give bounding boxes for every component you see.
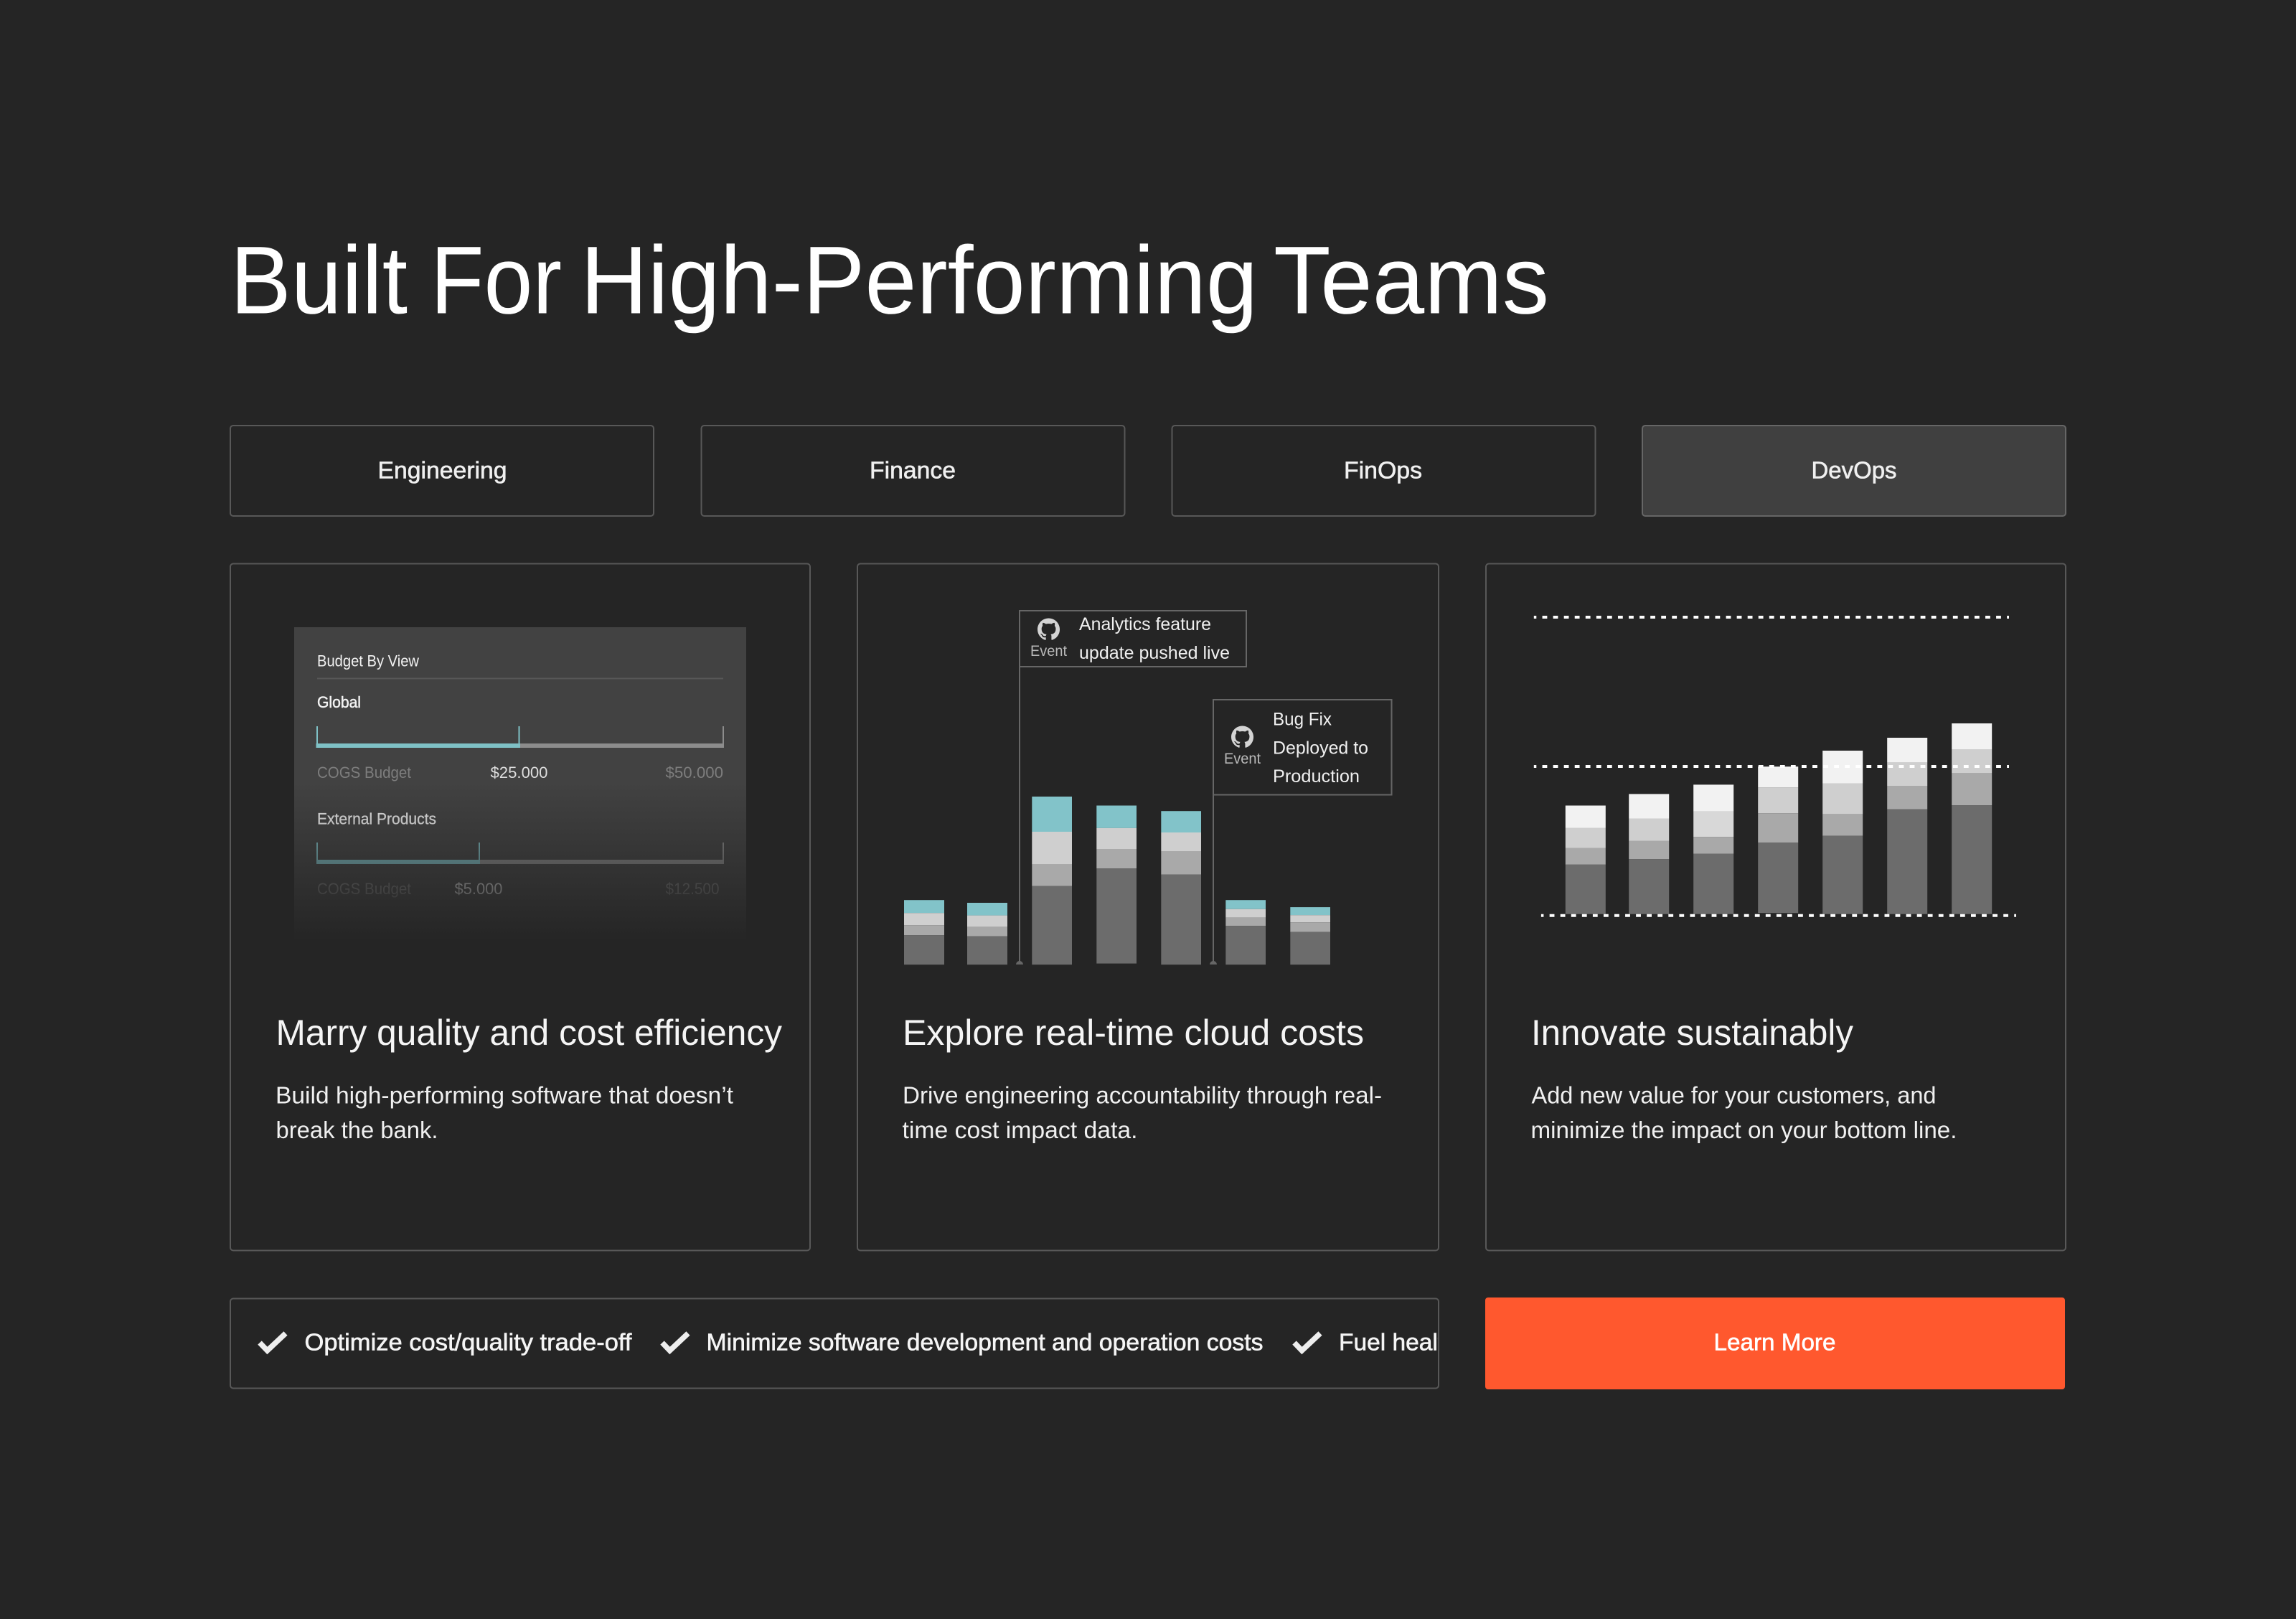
external products label: External Products bbox=[317, 810, 436, 828]
icon: github bbox=[1231, 726, 1253, 748]
bar 1 bbox=[1566, 805, 1606, 914]
icon: check bbox=[662, 1333, 688, 1351]
bar 5 bbox=[1161, 811, 1201, 965]
event label: Event bbox=[1030, 643, 1067, 660]
title: Teams bbox=[1274, 227, 1549, 334]
bar 3 bbox=[1032, 797, 1072, 965]
panel body: time cost impact data. bbox=[903, 1117, 1138, 1143]
title: For bbox=[430, 227, 562, 334]
callout text: update pushed live bbox=[1079, 643, 1230, 663]
bar 5 bbox=[1822, 751, 1863, 914]
tab: DevOps (active) bbox=[1642, 426, 2066, 516]
feature strip bbox=[230, 1299, 1458, 1388]
panel: innovate sustainably bbox=[1486, 564, 2066, 1250]
external products values: $12.500 bbox=[666, 880, 719, 898]
tab: Finance bbox=[702, 426, 1125, 516]
callout: analytics feature bbox=[1020, 611, 1246, 667]
event marker 2 bbox=[1210, 794, 1217, 965]
bar 4 bbox=[1096, 805, 1137, 964]
external products values bbox=[317, 880, 719, 898]
panel body bbox=[276, 1082, 733, 1143]
global budget values: $50.000 bbox=[666, 764, 723, 782]
panel body: minimize the impact on your bottom line. bbox=[1531, 1117, 1957, 1143]
global budget values: $25.000 bbox=[491, 764, 548, 782]
icon: github bbox=[1038, 619, 1060, 640]
panel body: Add new value for your customers, and bbox=[1531, 1082, 1936, 1108]
panel heading: Marry quality and cost efficiency bbox=[276, 1013, 782, 1053]
feature text: Optimize cost/quality trade-off bbox=[304, 1329, 632, 1355]
panel heading: Innovate sustainably bbox=[1531, 1013, 1853, 1053]
panel body bbox=[1531, 1082, 1957, 1143]
panel body: Drive engineering accountability through real- bbox=[903, 1082, 1382, 1108]
external products values: COGS Budget bbox=[317, 880, 411, 898]
external products values: $5.000 bbox=[455, 880, 502, 898]
bar 2 bbox=[1629, 794, 1669, 914]
title: High-Performing bbox=[580, 227, 1258, 334]
card heading: Budget By View bbox=[317, 652, 419, 670]
callout text bbox=[1079, 614, 1230, 663]
stacked bar chart bbox=[1566, 723, 1992, 914]
panel body bbox=[903, 1082, 1382, 1143]
panel: quality and cost bbox=[230, 564, 810, 1250]
tab: DevOps (active): DevOps bbox=[1811, 456, 1897, 484]
tabs row bbox=[230, 426, 2066, 516]
tab: Finance: Finance bbox=[870, 456, 956, 484]
icon: check bbox=[260, 1333, 286, 1351]
threshold lines bbox=[1534, 617, 2016, 916]
panel body: Build high-performing software that doesn’t bbox=[276, 1082, 733, 1108]
callout text: Bug Fix bbox=[1273, 709, 1332, 729]
bar 6 bbox=[1887, 738, 1927, 914]
global budget values bbox=[317, 764, 723, 782]
event label: Event bbox=[1224, 751, 1261, 767]
bar 2 bbox=[967, 903, 1007, 965]
callout text: Deployed to bbox=[1273, 738, 1368, 758]
button: learn more: Learn More bbox=[1713, 1329, 1835, 1355]
title bbox=[230, 227, 1549, 334]
tab: FinOps: FinOps bbox=[1344, 456, 1422, 484]
stacked bar chart bbox=[904, 797, 1330, 965]
bar 7 bbox=[1290, 907, 1330, 965]
callout text: Analytics feature bbox=[1079, 614, 1211, 634]
callout text: Production bbox=[1273, 766, 1360, 787]
bar 1 bbox=[904, 900, 944, 965]
bar 6 bbox=[1225, 900, 1266, 965]
tab: Engineering bbox=[230, 426, 654, 516]
global label: Global bbox=[317, 693, 361, 711]
callout text bbox=[1273, 709, 1368, 787]
feature text: Minimize software development and operation costs bbox=[706, 1329, 1263, 1355]
title: Built bbox=[230, 227, 408, 334]
panel heading: Explore real-time cloud costs bbox=[903, 1013, 1364, 1053]
tab: FinOps bbox=[1172, 426, 1596, 516]
feature text (clipped): Fuel health bbox=[1339, 1329, 1458, 1356]
button: learn more bbox=[1485, 1297, 2065, 1389]
bar 7 bbox=[1952, 723, 1992, 914]
global budget bar bbox=[316, 726, 724, 748]
external products bar bbox=[316, 843, 724, 864]
panel: real-time cloud costs bbox=[857, 564, 1439, 1250]
panel body: break the bank. bbox=[276, 1117, 438, 1143]
icon: check bbox=[1294, 1333, 1320, 1351]
budget card bbox=[293, 627, 748, 942]
event marker 1 bbox=[1016, 667, 1023, 965]
global budget values: COGS Budget bbox=[317, 764, 411, 782]
callout: bug fix bbox=[1213, 700, 1392, 795]
bar 4 bbox=[1758, 766, 1798, 913]
bar 3 bbox=[1693, 784, 1733, 914]
tab: Engineering: Engineering bbox=[377, 456, 507, 484]
